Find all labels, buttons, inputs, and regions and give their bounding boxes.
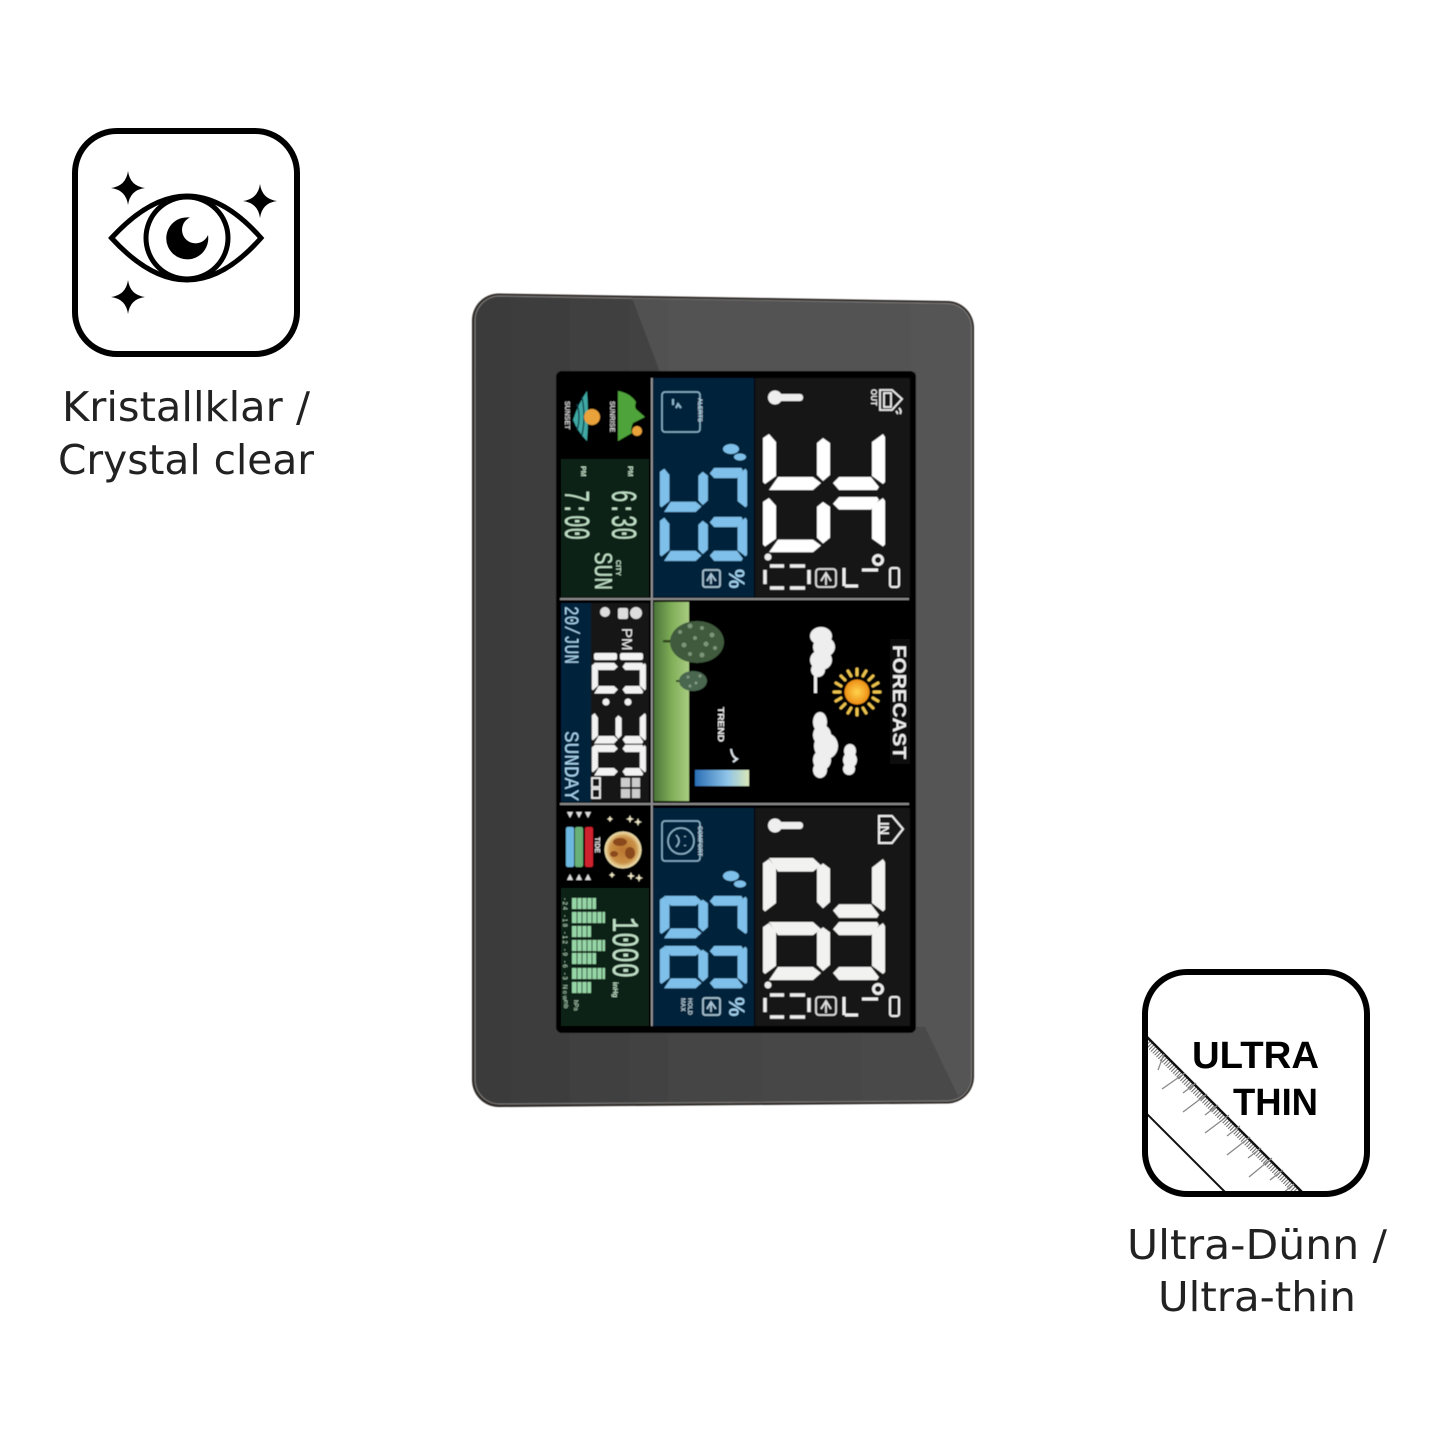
unit: degrees celsius — [844, 984, 882, 1015]
label: tide: TIDE — [593, 837, 600, 853]
icon: alerts box — [662, 392, 700, 432]
pressure gauge bar — [695, 770, 749, 786]
caption: ultra thin: Ultra-Dünn / — [1127, 1221, 1387, 1269]
label: trend: TREND — [716, 707, 725, 742]
icon: sunset — [573, 391, 600, 441]
weekday: SUNDAY — [558, 731, 581, 801]
label: pm: PM — [626, 466, 633, 477]
decimal point and tenth digit — [764, 982, 809, 1017]
weather station device — [472, 294, 974, 1107]
pressure history panel — [561, 896, 644, 1011]
moon phase and tide panel — [566, 812, 643, 882]
LCD digit 3 — [592, 714, 646, 743]
pressure scale labels: hPa — [572, 1000, 578, 1011]
LCD digit 0 — [592, 663, 646, 693]
LCD digit 8 — [763, 922, 885, 980]
grass strip — [654, 602, 689, 801]
LCD digit 3 — [763, 434, 885, 490]
seconds — [592, 778, 600, 798]
icon: alarm bells — [621, 778, 640, 798]
percent sign: % — [724, 569, 749, 589]
label: hold: HOLD — [686, 998, 692, 1016]
screen cell backgrounds — [560, 378, 910, 1026]
icon: humidity signal box — [703, 570, 720, 587]
device bezel — [472, 294, 974, 1107]
outdoor temperature panel — [763, 389, 902, 588]
pressure value: 1000 — [601, 917, 644, 978]
indoor humidity panel — [660, 821, 749, 1017]
icon: lower cloud — [813, 712, 838, 778]
day of week: SUN — [587, 552, 617, 590]
icon text: ultra thin: THIN — [1233, 1082, 1318, 1124]
LCD digit 0 — [592, 745, 646, 775]
indoor temperature panel — [763, 816, 903, 1017]
sunrise and sunset panel — [563, 391, 645, 441]
LCD digit 5 — [763, 497, 885, 552]
icon: battery — [890, 997, 899, 1016]
caption: crystal clear: Crystal clear — [58, 436, 314, 484]
icon: top cloud — [810, 627, 835, 693]
colon — [602, 698, 632, 706]
icon: battery — [890, 568, 899, 587]
icon: indoor house — [879, 816, 903, 843]
outdoor humidity panel — [660, 392, 749, 589]
decimal point and tenth digit — [764, 554, 809, 588]
LCD digit 1 — [594, 653, 643, 660]
icon: signal box — [816, 997, 836, 1015]
icon: signal tower and alarm — [600, 607, 642, 619]
LCD digit 5 — [660, 468, 747, 512]
unit: degrees celsius — [844, 556, 882, 586]
icon: water drops — [723, 444, 746, 460]
icon: moon — [604, 832, 642, 868]
label: pm: PM — [618, 628, 635, 650]
icon: ultra thin ruler — [1140, 972, 1367, 1201]
icon: eye with sparkles — [75, 131, 297, 354]
percent sign: % — [724, 997, 749, 1017]
caption: ultra thin: Ultra-thin — [1158, 1273, 1356, 1321]
clock panel — [558, 606, 646, 801]
icon: small tree — [676, 671, 707, 691]
icon: water drops — [723, 871, 746, 888]
label: pm: PM — [579, 466, 586, 477]
LCD digit 2 — [763, 858, 885, 918]
icon: signal box — [816, 569, 836, 587]
icon: thermometer — [768, 818, 803, 832]
caption: crystal clear: Kristallklar / — [62, 383, 310, 431]
sunrise time: 6:30 — [601, 490, 642, 540]
icon text: ultra thin: ULTRA — [1192, 1035, 1319, 1077]
icon: small cloud — [843, 744, 857, 775]
pressure scale labels: mb — [562, 1000, 568, 1009]
bar grid lines — [577, 896, 602, 995]
label: out: OUT — [869, 389, 878, 406]
icon: large tree — [663, 621, 724, 663]
icon: sun — [834, 669, 880, 715]
LCD digit 9 — [660, 517, 747, 561]
infographic canvas — [60, 128, 1387, 1312]
label: in: IN — [877, 822, 892, 835]
tide arrows — [567, 812, 591, 880]
icon: thermometer — [768, 390, 803, 404]
icon: outdoor house — [880, 390, 902, 414]
label: comfort: COMFORT — [696, 826, 702, 857]
label: city: CITY — [614, 560, 621, 576]
label: alerts: ALERTS — [696, 398, 702, 422]
icon: comfort face box — [662, 821, 700, 861]
city sunrise and sunset times panel — [554, 466, 642, 590]
label: sunset: SUNSET — [563, 401, 570, 430]
LCD digit 8 — [660, 946, 747, 988]
feature: ultra thin — [1127, 972, 1387, 1321]
forecast panel — [654, 602, 910, 801]
LCD digit 6 — [660, 896, 747, 938]
pressure unit: inHg — [611, 982, 618, 998]
icon: sunrise — [618, 391, 645, 441]
feature: crystal clear — [58, 131, 314, 484]
icon: humidity signal box — [703, 998, 720, 1015]
chart hour labels: -24 -18 -12 -9 -6 -3 Now — [561, 898, 567, 1001]
icon: trend arrow — [731, 749, 737, 762]
label: hold: MAX — [679, 998, 685, 1011]
label: forecast: FORECAST — [889, 645, 909, 759]
date: 20/JUN — [558, 606, 581, 664]
label: sunrise: SUNRISE — [608, 401, 615, 432]
tide bars — [566, 827, 593, 867]
pressure bar chart — [572, 898, 605, 993]
sunset time: 7:00 — [554, 490, 595, 540]
sparkles — [607, 815, 643, 882]
